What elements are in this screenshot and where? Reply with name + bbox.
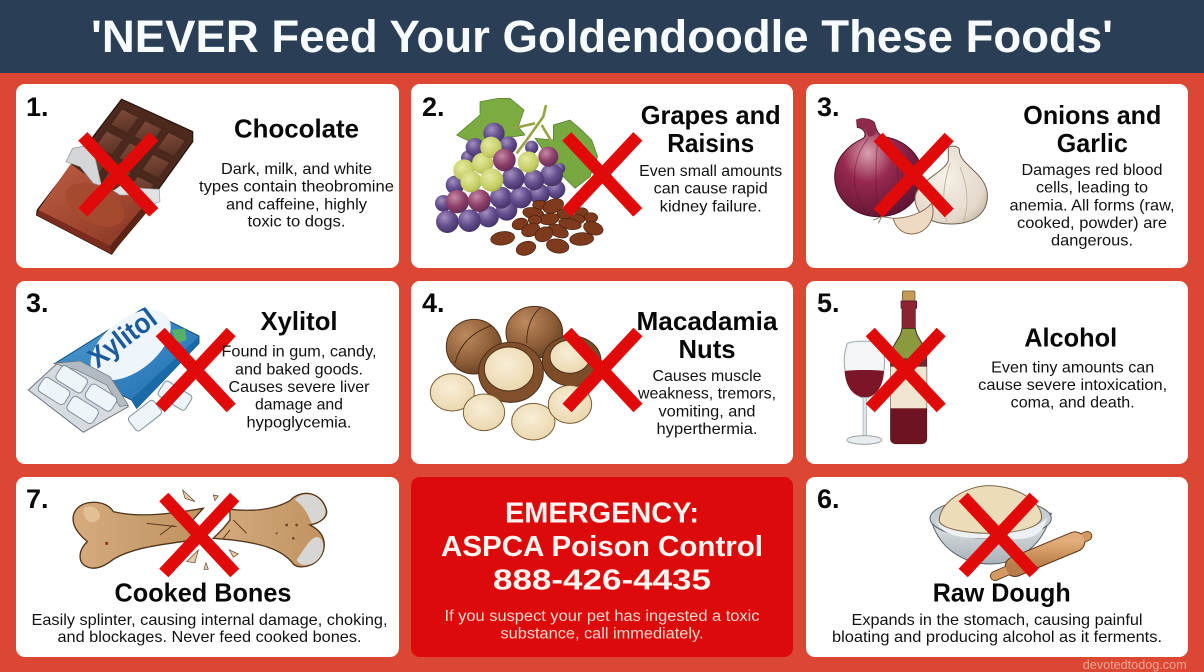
header banner [0,0,1204,73]
emergency heading [441,497,763,596]
description [32,612,388,646]
description: hyperthermia. [656,421,758,438]
icon: xylitol gum pack [28,296,199,432]
icon: dough bowl and rolling pin [930,486,1087,576]
description: damage and [255,397,343,414]
heading: Chocolate [234,114,359,144]
description: Causes severe liver [228,379,370,396]
watermark: devotedtodog.com [1083,657,1187,672]
description: Easily splinter, causing internal damage, choking, [32,612,388,629]
icon: wine bottle and glass [844,291,927,444]
icon: splintered bone [73,490,327,569]
heading: Garlic [1057,128,1128,158]
panel: alcohol [806,281,1188,464]
description: Expands in the stomach, causing painful [852,612,1142,629]
description [1010,162,1174,250]
heading [1023,100,1161,158]
description: toxic to dogs. [248,214,346,231]
heading: Alcohol [1024,322,1117,352]
description: bloating and producing alcohol as it ferments. [832,629,1162,646]
emergency note: substance, call immediately. [500,625,704,642]
description: anemia. All forms (raw, [1010,197,1174,214]
description: and caffeine, highly [226,196,367,213]
red cross [963,497,1034,573]
heading: Onions and [1023,100,1161,130]
emergency note [444,608,760,642]
description: coma, and death. [1011,395,1135,412]
number 1: 1. [26,92,49,122]
number 2: 2. [422,92,445,122]
description: Causes muscle [652,368,762,385]
heading: Grapes and [641,100,781,130]
description [222,344,376,431]
heading: Raisins [667,128,754,158]
icon: macadamia nuts [430,306,601,440]
icon: chocolate bar [37,99,193,254]
red cross [870,332,941,408]
heading: Cooked Bones [114,578,292,608]
number 6: 6. [817,484,840,514]
red cross [164,497,235,573]
description: vomiting, and [658,403,756,420]
emergency heading: EMERGENCY: [505,497,699,529]
brand text: Xylitol [82,302,163,375]
description: kidney failure. [660,198,762,215]
panel: xylitol [16,281,399,464]
heading: Nuts [678,334,736,364]
description: types contain theobromine [199,179,394,196]
icon: onion and garlic [835,119,987,234]
description: Even small amounts [639,163,782,180]
number 5: 5. [817,288,840,318]
description: hypoglycemia. [246,414,352,431]
heading [641,100,781,158]
description: can cause rapid [654,181,768,198]
panel: macadamia nuts [411,281,793,464]
description [199,161,394,231]
description: weakness, tremors, [637,386,776,403]
heading: Xylitol [260,306,338,336]
number 7: 7. [26,484,49,514]
description: and baked goods. [235,361,363,378]
red cross [567,136,638,212]
panel: raw dough [806,477,1188,657]
heading: Macadamia [636,306,778,336]
description: cooked, powder) are [1017,215,1167,232]
number 4: 4. [422,288,445,318]
panel: cooked bones [16,477,399,657]
description: dangerous. [1051,233,1133,250]
red cross [160,332,231,408]
description [978,359,1167,412]
number 3: 3. [26,288,49,318]
description [637,368,776,438]
title: 'NEVER Feed Your Goldendoodle These Foods' [91,11,1113,62]
description: Damages red blood [1022,162,1162,179]
emergency heading: 888-426-4435 [493,564,711,596]
icon: grapes and raisins [435,98,605,258]
panel: chocolate [16,84,399,268]
panel: onions and garlic [806,84,1188,268]
panel: grapes and raisins [411,84,793,268]
heading [636,306,778,364]
description [832,612,1162,646]
description [639,163,782,215]
heading: Raw Dough [933,578,1071,608]
emergency heading: ASPCA Poison Control [441,531,763,563]
emergency note: If you suspect your pet has ingested a toxic [444,608,760,625]
red cross [878,137,949,213]
description: cause severe intoxication, [978,377,1167,394]
red cross [567,332,638,408]
red cross [83,136,154,212]
description: and blockages. Never feed cooked bones. [58,629,362,646]
description: Found in gum, candy, [222,344,376,361]
number 3: 3. [817,92,840,122]
description: Even tiny amounts can [991,359,1154,376]
description: Dark, milk, and white [221,161,372,178]
description: cells, leading to [1036,180,1148,197]
panel: emergency callout [411,477,793,657]
